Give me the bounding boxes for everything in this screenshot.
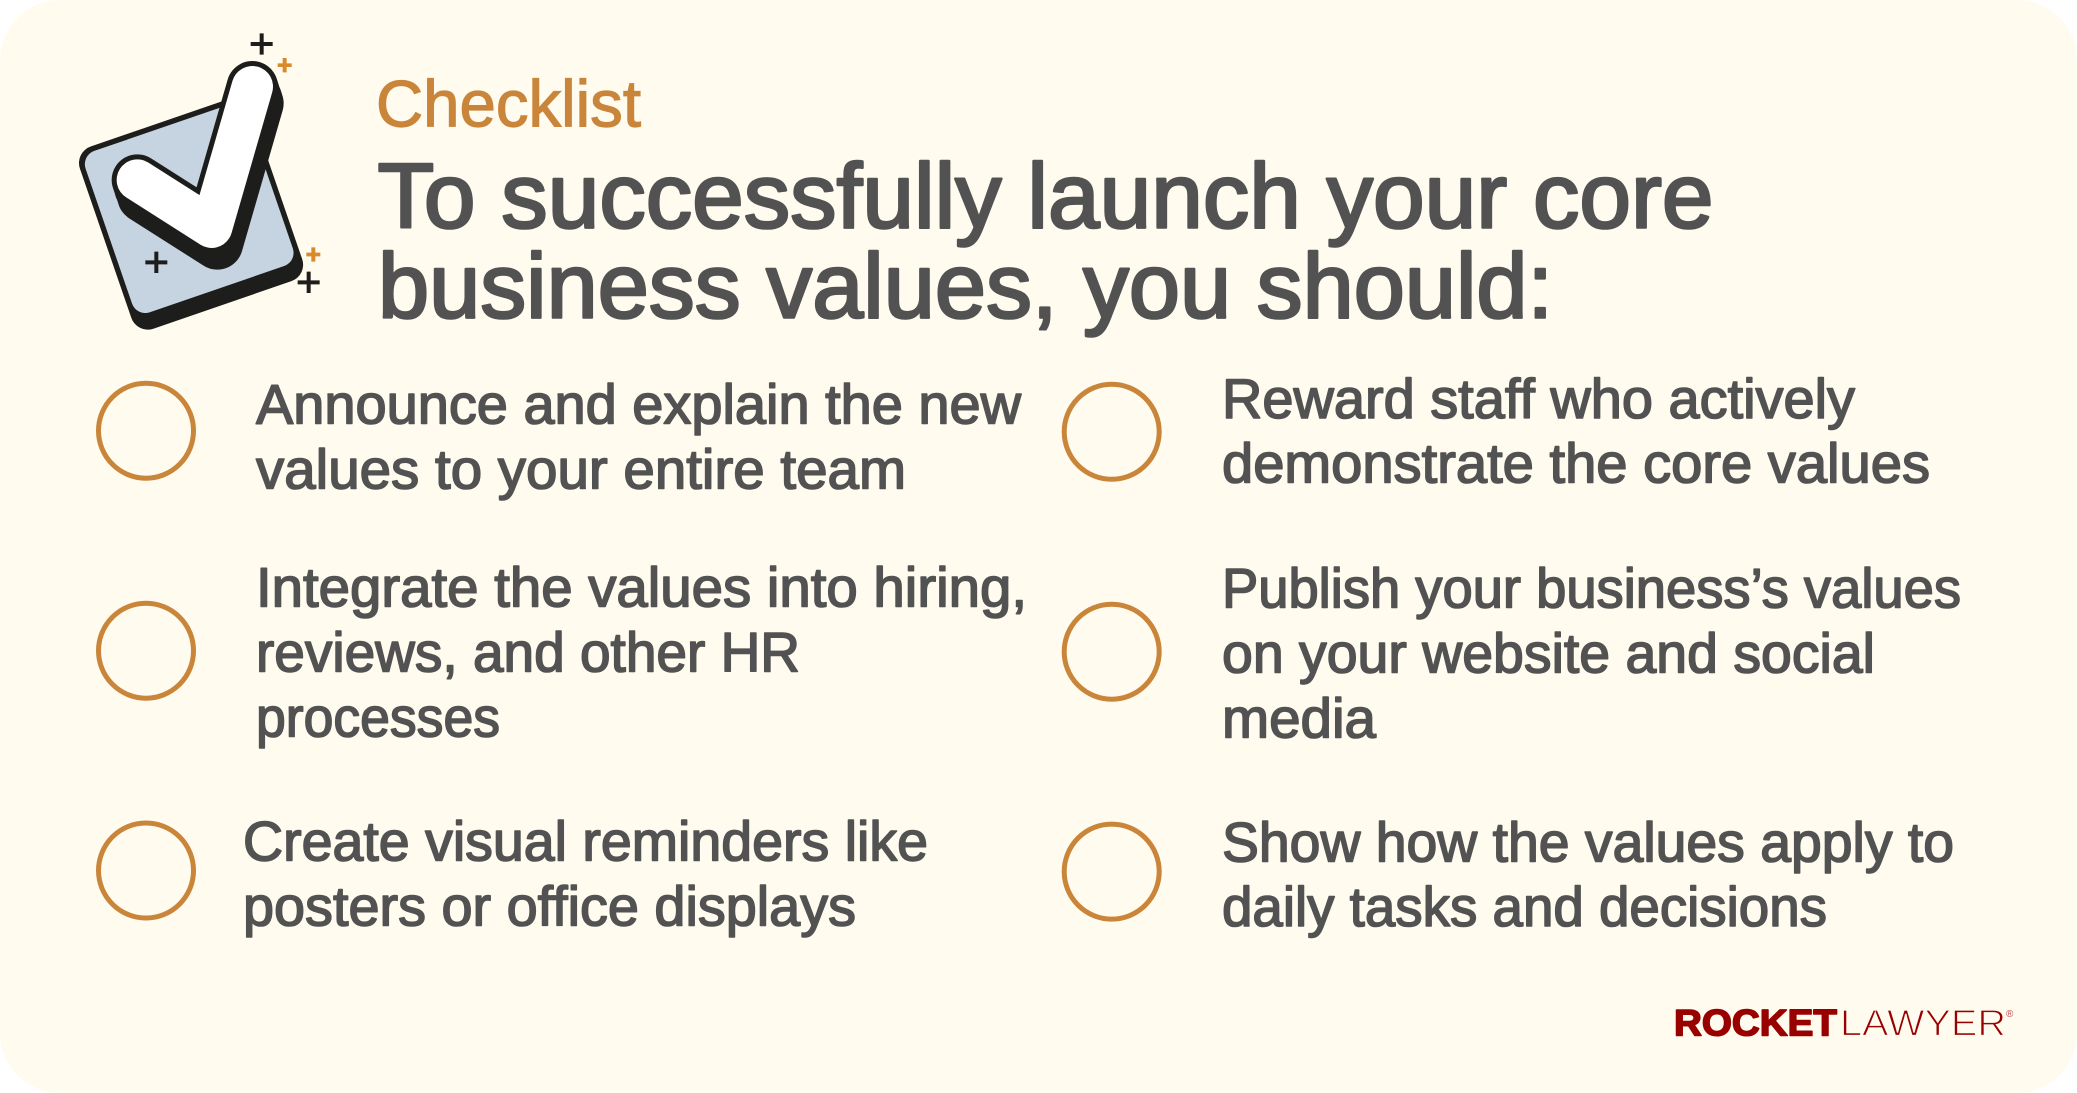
title: To successfully launch your core [378, 146, 1714, 248]
checkbox circle [98, 383, 194, 478]
logo: Rocket Lawyer: LAWYER [1840, 1002, 2006, 1043]
item text: Create visual reminders like [243, 810, 928, 873]
item text [1222, 811, 1954, 938]
orange sparkles [278, 58, 320, 262]
item text: on your website and social [1222, 622, 1875, 685]
logo: Rocket Lawyer: ROCKET [1674, 1002, 1837, 1043]
check mark extrusion [137, 87, 258, 244]
item: publish values [1064, 556, 1961, 749]
item text [256, 556, 1027, 749]
checkbox circle [1064, 604, 1159, 699]
item text [256, 372, 1022, 500]
item text: posters or office displays [243, 875, 856, 938]
item text: processes [256, 686, 500, 749]
item: announce and explain [98, 372, 1022, 500]
item text [1222, 367, 1930, 495]
item text: reviews, and other HR [256, 621, 800, 684]
icon: checkbox with check mark [74, 33, 320, 334]
item text: demonstrate the core values [1222, 432, 1930, 495]
item: reward staff [1064, 367, 1930, 495]
box face [81, 100, 297, 317]
item text: Publish your business’s values [1222, 556, 1961, 619]
box shadow and outline [74, 93, 308, 334]
item text [1222, 556, 1961, 749]
item text: Integrate the values into hiring, [256, 556, 1027, 619]
check mark face [137, 87, 252, 227]
item text: values to your entire team [256, 437, 906, 500]
logo: Rocket Lawyer: ® [2006, 1009, 2014, 1020]
item text: Announce and explain the new [256, 372, 1022, 435]
item text: daily tasks and decisions [1222, 875, 1827, 938]
checkbox circle [98, 823, 194, 918]
sparkles [145, 33, 320, 293]
eyebrow heading: Checklist [376, 67, 641, 141]
item text: media [1222, 686, 1377, 749]
item text [243, 810, 928, 938]
item text: Show how the values apply to [1222, 811, 1954, 874]
checkbox circle [1064, 824, 1159, 919]
item: integrate into HR [98, 556, 1027, 749]
item text: Reward staff who actively [1222, 367, 1855, 430]
checkbox circle [1064, 384, 1159, 479]
item: show how values apply [1064, 811, 1954, 938]
title [378, 146, 1714, 338]
checkbox circle [98, 603, 194, 698]
item: visual reminders [98, 810, 928, 938]
title: business values, you should: [378, 236, 1553, 338]
logo: Rocket Lawyer [1674, 1002, 2014, 1043]
